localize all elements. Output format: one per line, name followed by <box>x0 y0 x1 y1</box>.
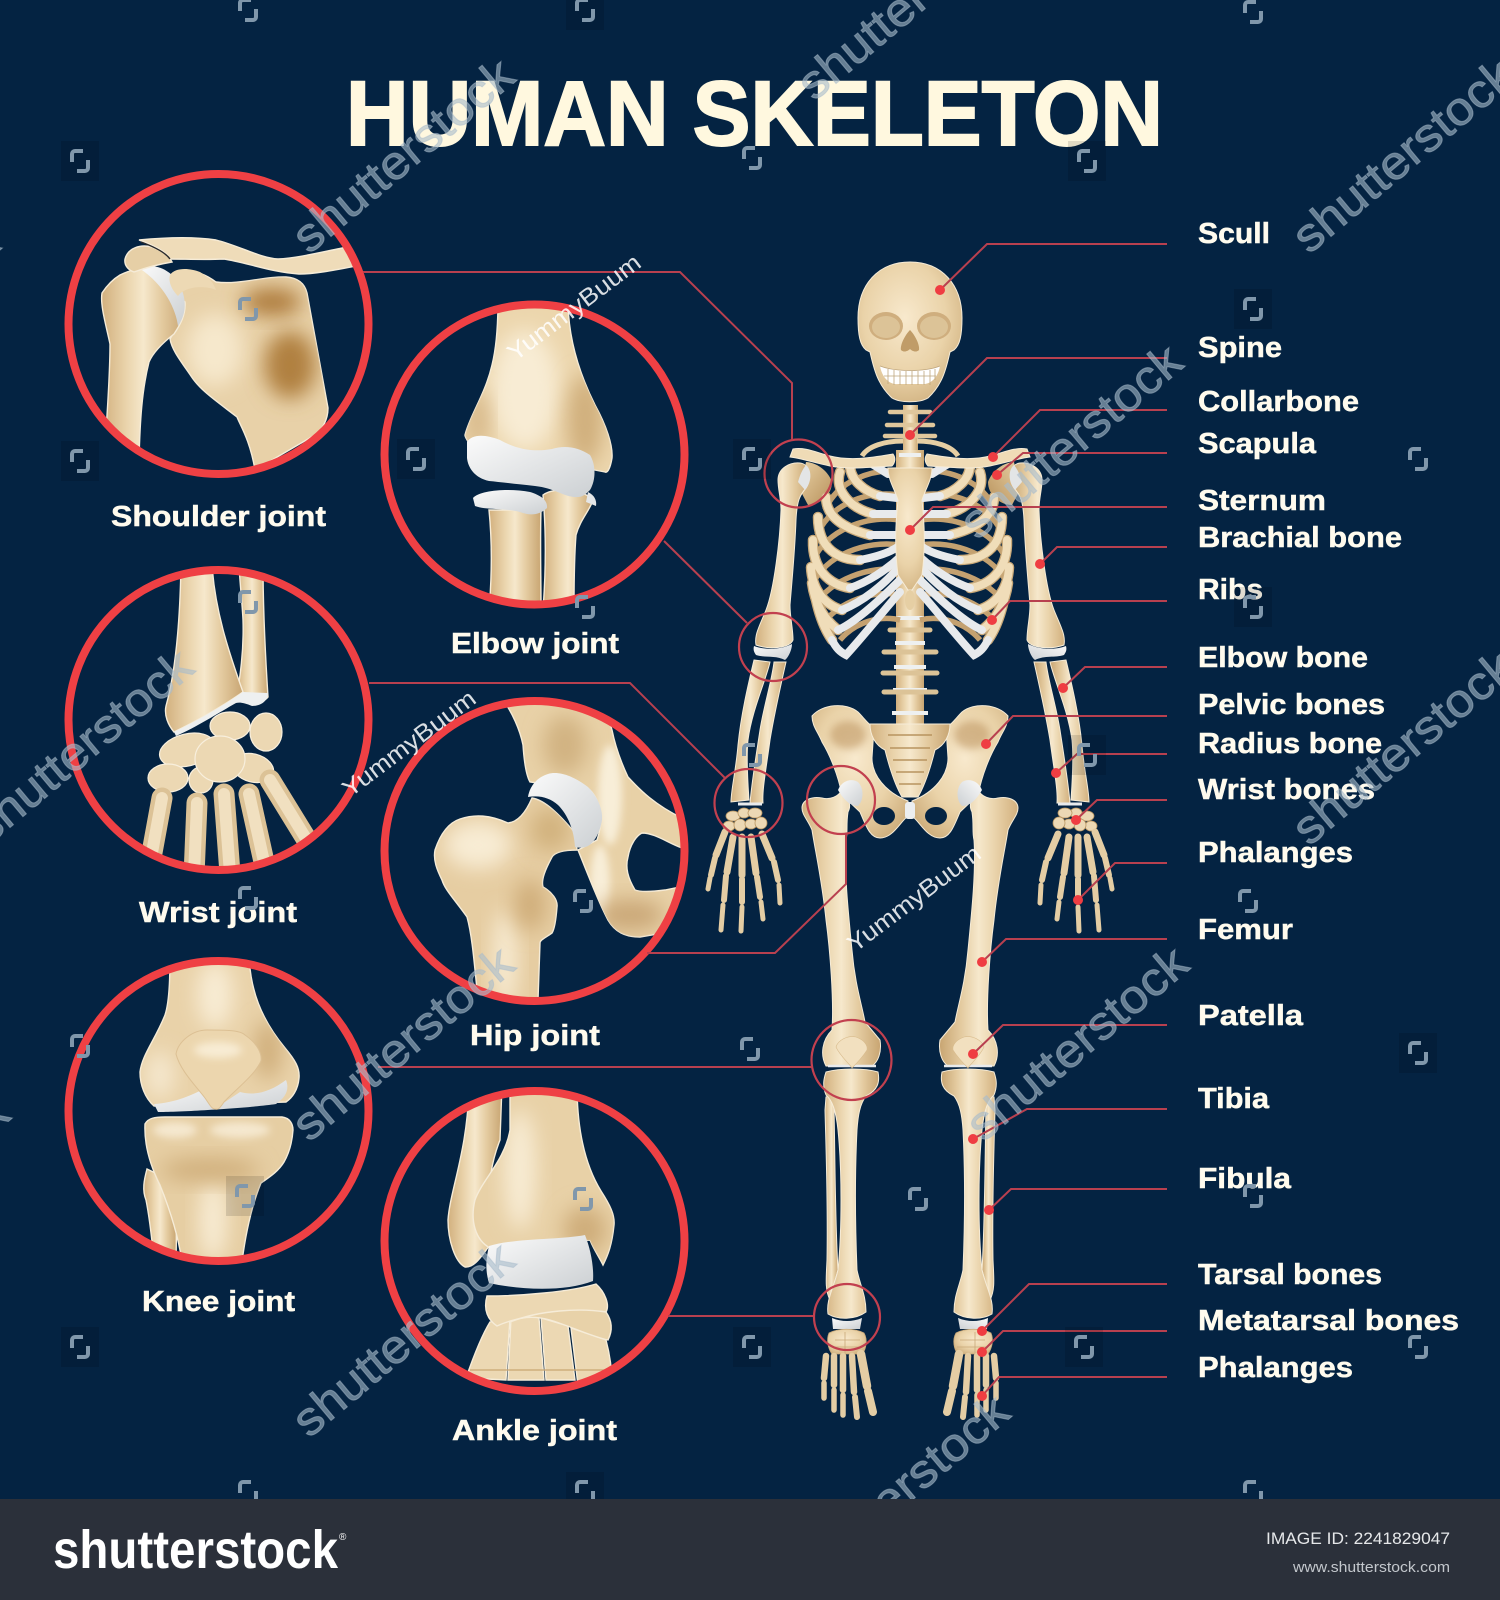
footer registered mark: ® <box>339 1532 347 1543</box>
panel: hip joint inset <box>434 690 682 1010</box>
knee cartilage <box>154 1080 287 1112</box>
watermark: shutterstock diagonal text: shutterstock <box>949 333 1192 549</box>
panel: wrist joint inset <box>147 565 310 900</box>
tibia shading <box>504 1110 607 1254</box>
patella <box>176 1030 261 1109</box>
wrist cartilage <box>174 692 268 736</box>
femur shading <box>146 961 282 1099</box>
sacrum <box>870 724 950 819</box>
ring: shoulder <box>68 174 368 474</box>
tibia <box>145 1117 293 1270</box>
label: Pelvic bones: Pelvic bones <box>1198 689 1385 721</box>
right half of skeleton <box>912 441 1112 1417</box>
carpal bones <box>148 712 282 793</box>
tarsal band 2 <box>510 1310 611 1340</box>
leader: Patella <box>968 1025 1167 1059</box>
leader: Femur <box>977 939 1167 967</box>
humeral head cartilage <box>139 266 185 326</box>
leader: Scull <box>935 244 1167 295</box>
label: Femur: Femur <box>1198 914 1293 946</box>
label: hip joint: Hip joint <box>470 1020 600 1052</box>
fibula <box>144 1169 176 1260</box>
label: Elbow bone: Elbow bone <box>1198 642 1368 674</box>
footer bar <box>0 1499 1500 1600</box>
watermark: shutterstock diagonal text: shutterstock <box>955 935 1198 1151</box>
leader: Radius bone <box>1051 754 1167 778</box>
watermark: shutterstock diagonal text: shutterstock <box>776 1383 1019 1599</box>
acromion <box>125 246 172 272</box>
watermark: shutterstock diagonal text: shutterstock <box>281 935 524 1151</box>
title: HUMAN SKELETON <box>346 63 1163 165</box>
label: Patella: Patella <box>1198 1000 1304 1032</box>
label: shoulder joint: Shoulder joint <box>111 501 326 533</box>
pelvis shading <box>543 715 664 931</box>
label: Ribs: Ribs <box>1198 574 1263 606</box>
tibia shading <box>153 1122 270 1262</box>
leader: Metatarsal bones <box>977 1331 1167 1357</box>
watermark: shutterstock diagonal text: shutterstock <box>281 47 524 263</box>
leader: Fibula <box>984 1189 1167 1215</box>
ring: knee <box>68 961 368 1261</box>
leader: Wrist bones <box>1071 800 1167 825</box>
femur <box>140 950 299 1106</box>
fibula <box>448 1085 502 1267</box>
leader: Pelvic bones <box>981 716 1167 749</box>
footer logo: shutterstock <box>53 1520 339 1580</box>
femoral head cartilage <box>528 773 602 848</box>
label: Tibia: Tibia <box>1198 1083 1270 1115</box>
watermark: shutterstock diagonal text: shutterstock <box>281 1231 524 1447</box>
radius <box>165 565 243 732</box>
humerus <box>465 300 612 472</box>
leader: Phalanges hand <box>1073 863 1167 905</box>
ring: hip <box>384 701 684 1001</box>
humerus shading <box>468 330 603 466</box>
scapula <box>170 271 328 470</box>
label: Fibula: Fibula <box>1198 1163 1292 1195</box>
label: Scapula: Scapula <box>1198 428 1317 460</box>
ulna <box>238 576 269 700</box>
label: Collarbone: Collarbone <box>1198 386 1359 418</box>
label: ankle joint: Ankle joint <box>452 1415 617 1447</box>
forearm bones <box>489 510 541 610</box>
leader: Tibia <box>968 1109 1167 1144</box>
footer image id: IMAGE ID: 2241829047 <box>1266 1529 1450 1548</box>
left half of skeleton <box>708 441 908 1417</box>
panel: elbow joint inset <box>465 300 612 610</box>
label: Sternum: Sternum <box>1198 485 1326 517</box>
tarsal band 1 <box>486 1284 607 1326</box>
leader: Brachial bone <box>1035 547 1167 569</box>
label: Phalanges: Phalanges <box>1198 1352 1353 1384</box>
tibia <box>473 1085 614 1265</box>
watermark: contributor name: YummyBuum <box>842 840 986 958</box>
metacarpal bones <box>142 770 314 866</box>
label: Radius bone: Radius bone <box>1198 728 1382 760</box>
joint locator circles on skeleton <box>714 440 892 1350</box>
humerus <box>102 268 185 460</box>
label: Metatarsal bones: Metatarsal bones <box>1198 1305 1459 1337</box>
sternum <box>888 468 932 610</box>
leader: Spine <box>905 358 1167 440</box>
leader: Sternum <box>905 507 1167 535</box>
femur shading <box>444 808 570 1010</box>
label list: bone names <box>1198 218 1459 1384</box>
ring: wrist <box>68 570 368 870</box>
panel: skeleton figure <box>708 262 1112 1417</box>
leader: Scapula <box>992 453 1167 480</box>
panel: ankle joint inset <box>448 1085 620 1385</box>
pelvis <box>503 690 682 937</box>
label: Phalanges: Phalanges <box>1198 837 1353 869</box>
label: Scull: Scull <box>1198 218 1270 250</box>
leader: Tarsal bones <box>977 1284 1167 1336</box>
ring: ankle <box>384 1091 684 1391</box>
ankle cartilage <box>486 1235 593 1289</box>
radius head cartilage <box>473 490 547 514</box>
femur <box>434 798 577 1000</box>
leader: Phalanges foot <box>977 1377 1167 1401</box>
label: knee joint: Knee joint <box>142 1286 295 1318</box>
label: Tarsal bones: Tarsal bones <box>1198 1259 1382 1291</box>
clavicle <box>139 238 356 274</box>
leader: Ribs <box>987 601 1167 625</box>
panel: shoulder joint inset <box>102 238 356 470</box>
ring: elbow <box>384 304 684 604</box>
leader: Collarbone <box>988 410 1167 462</box>
elbow cartilage <box>467 436 594 497</box>
label: Brachial bone: Brachial bone <box>1198 522 1402 554</box>
label: Wrist bones: Wrist bones <box>1198 774 1375 806</box>
leader: Elbow bone <box>1058 667 1167 693</box>
metatarsal bones <box>468 1318 612 1381</box>
connector lines from joint insets <box>363 272 846 1316</box>
label: elbow joint: Elbow joint <box>451 628 619 660</box>
label: wrist joint: Wrist joint <box>139 897 297 929</box>
watermark: contributor name: YummyBuum <box>502 249 646 367</box>
label: Spine: Spine <box>1198 332 1282 364</box>
panel: knee joint inset <box>140 950 299 1270</box>
scapula shading <box>187 288 316 399</box>
spine <box>883 405 937 740</box>
watermark: contributor name: YummyBuum <box>337 685 481 803</box>
footer website: www.shutterstock.com <box>1292 1559 1450 1576</box>
watermark: contributor name <box>337 249 986 958</box>
skull <box>858 262 962 402</box>
